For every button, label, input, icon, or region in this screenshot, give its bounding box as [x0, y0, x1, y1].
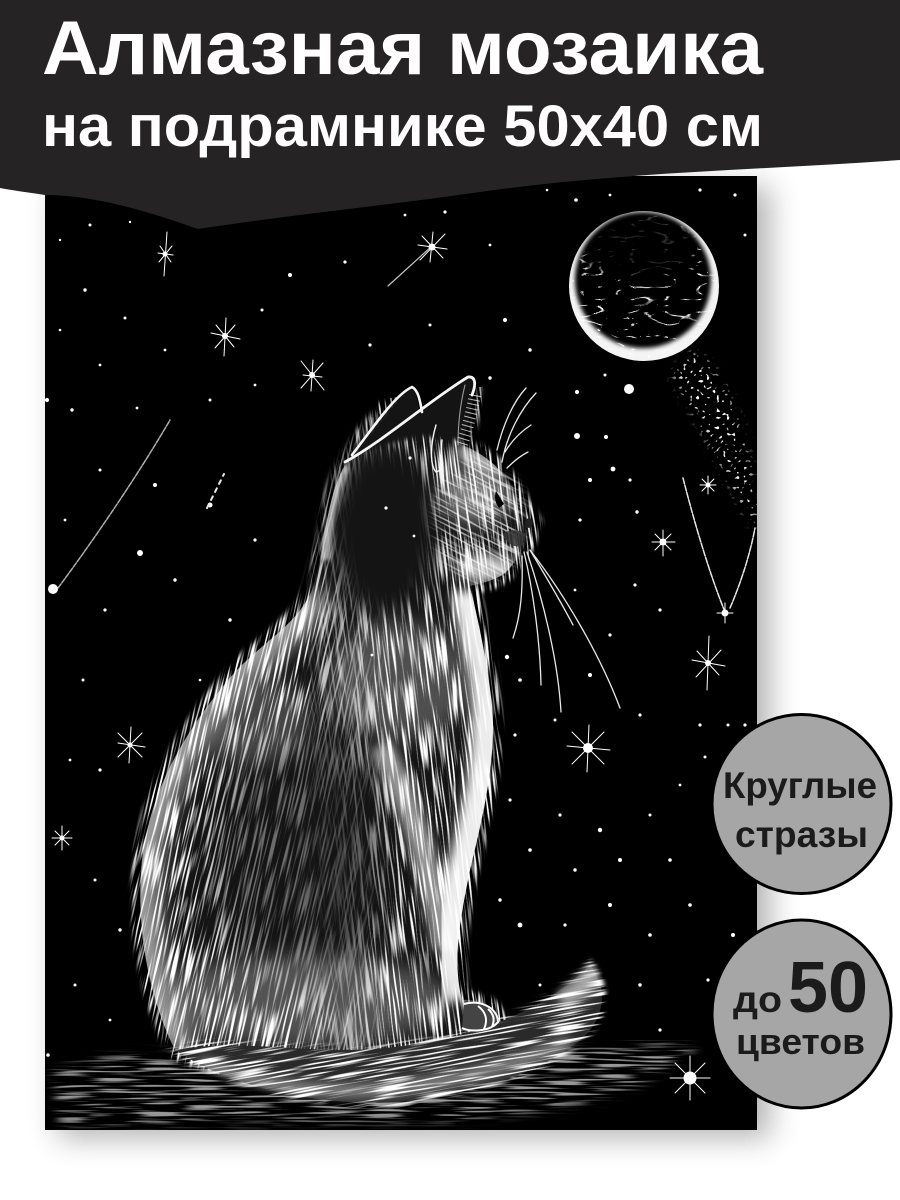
moon web texture: [572, 216, 716, 358]
muzzle shadow: [503, 530, 527, 546]
badge: round rhinestones: стразы: [735, 814, 868, 855]
badge: round rhinestones: [712, 714, 891, 894]
fur streaks: [128, 386, 546, 1075]
title: Алмазная мозаика: [42, 6, 764, 91]
badge: up to 50 colours: цветов: [736, 1021, 865, 1062]
moon: [568, 210, 720, 362]
ledge: [45, 1040, 705, 1130]
left body fur: [128, 416, 386, 1075]
tail: [164, 956, 610, 1110]
badge: round rhinestones: Круглые: [723, 765, 877, 806]
star dust beside the moon: [666, 345, 757, 529]
night sky panel: [45, 176, 757, 1130]
top banner: [0, 0, 900, 229]
sparkle stars: [52, 232, 733, 1100]
canvas shadow: [58, 186, 770, 1138]
banner shape: [0, 0, 900, 229]
ear tufts: [462, 395, 475, 445]
cat base: [140, 376, 533, 1068]
face fur: [427, 453, 532, 589]
right body fur: [304, 386, 546, 1050]
badge: up to 50 colours: [712, 920, 891, 1108]
moon crescent rim: [569, 211, 719, 361]
lit edges and tone: [140, 439, 517, 1050]
eye: [495, 491, 504, 508]
ears outline: [345, 377, 475, 472]
shooting stars: [58, 246, 755, 612]
nose: [526, 518, 532, 528]
subtitle: на подрамнике 50х40 см: [42, 94, 763, 159]
badge: up to 50 colours: до: [733, 979, 782, 1020]
whiskers: [497, 388, 620, 712]
cat: [128, 376, 621, 1110]
badge: up to 50 colours: 50: [788, 948, 868, 1028]
paw: [462, 1003, 498, 1030]
back specks on head: [371, 456, 509, 659]
canvas artwork: cat under the moon: [45, 176, 757, 1130]
stars field: [45, 188, 747, 1057]
